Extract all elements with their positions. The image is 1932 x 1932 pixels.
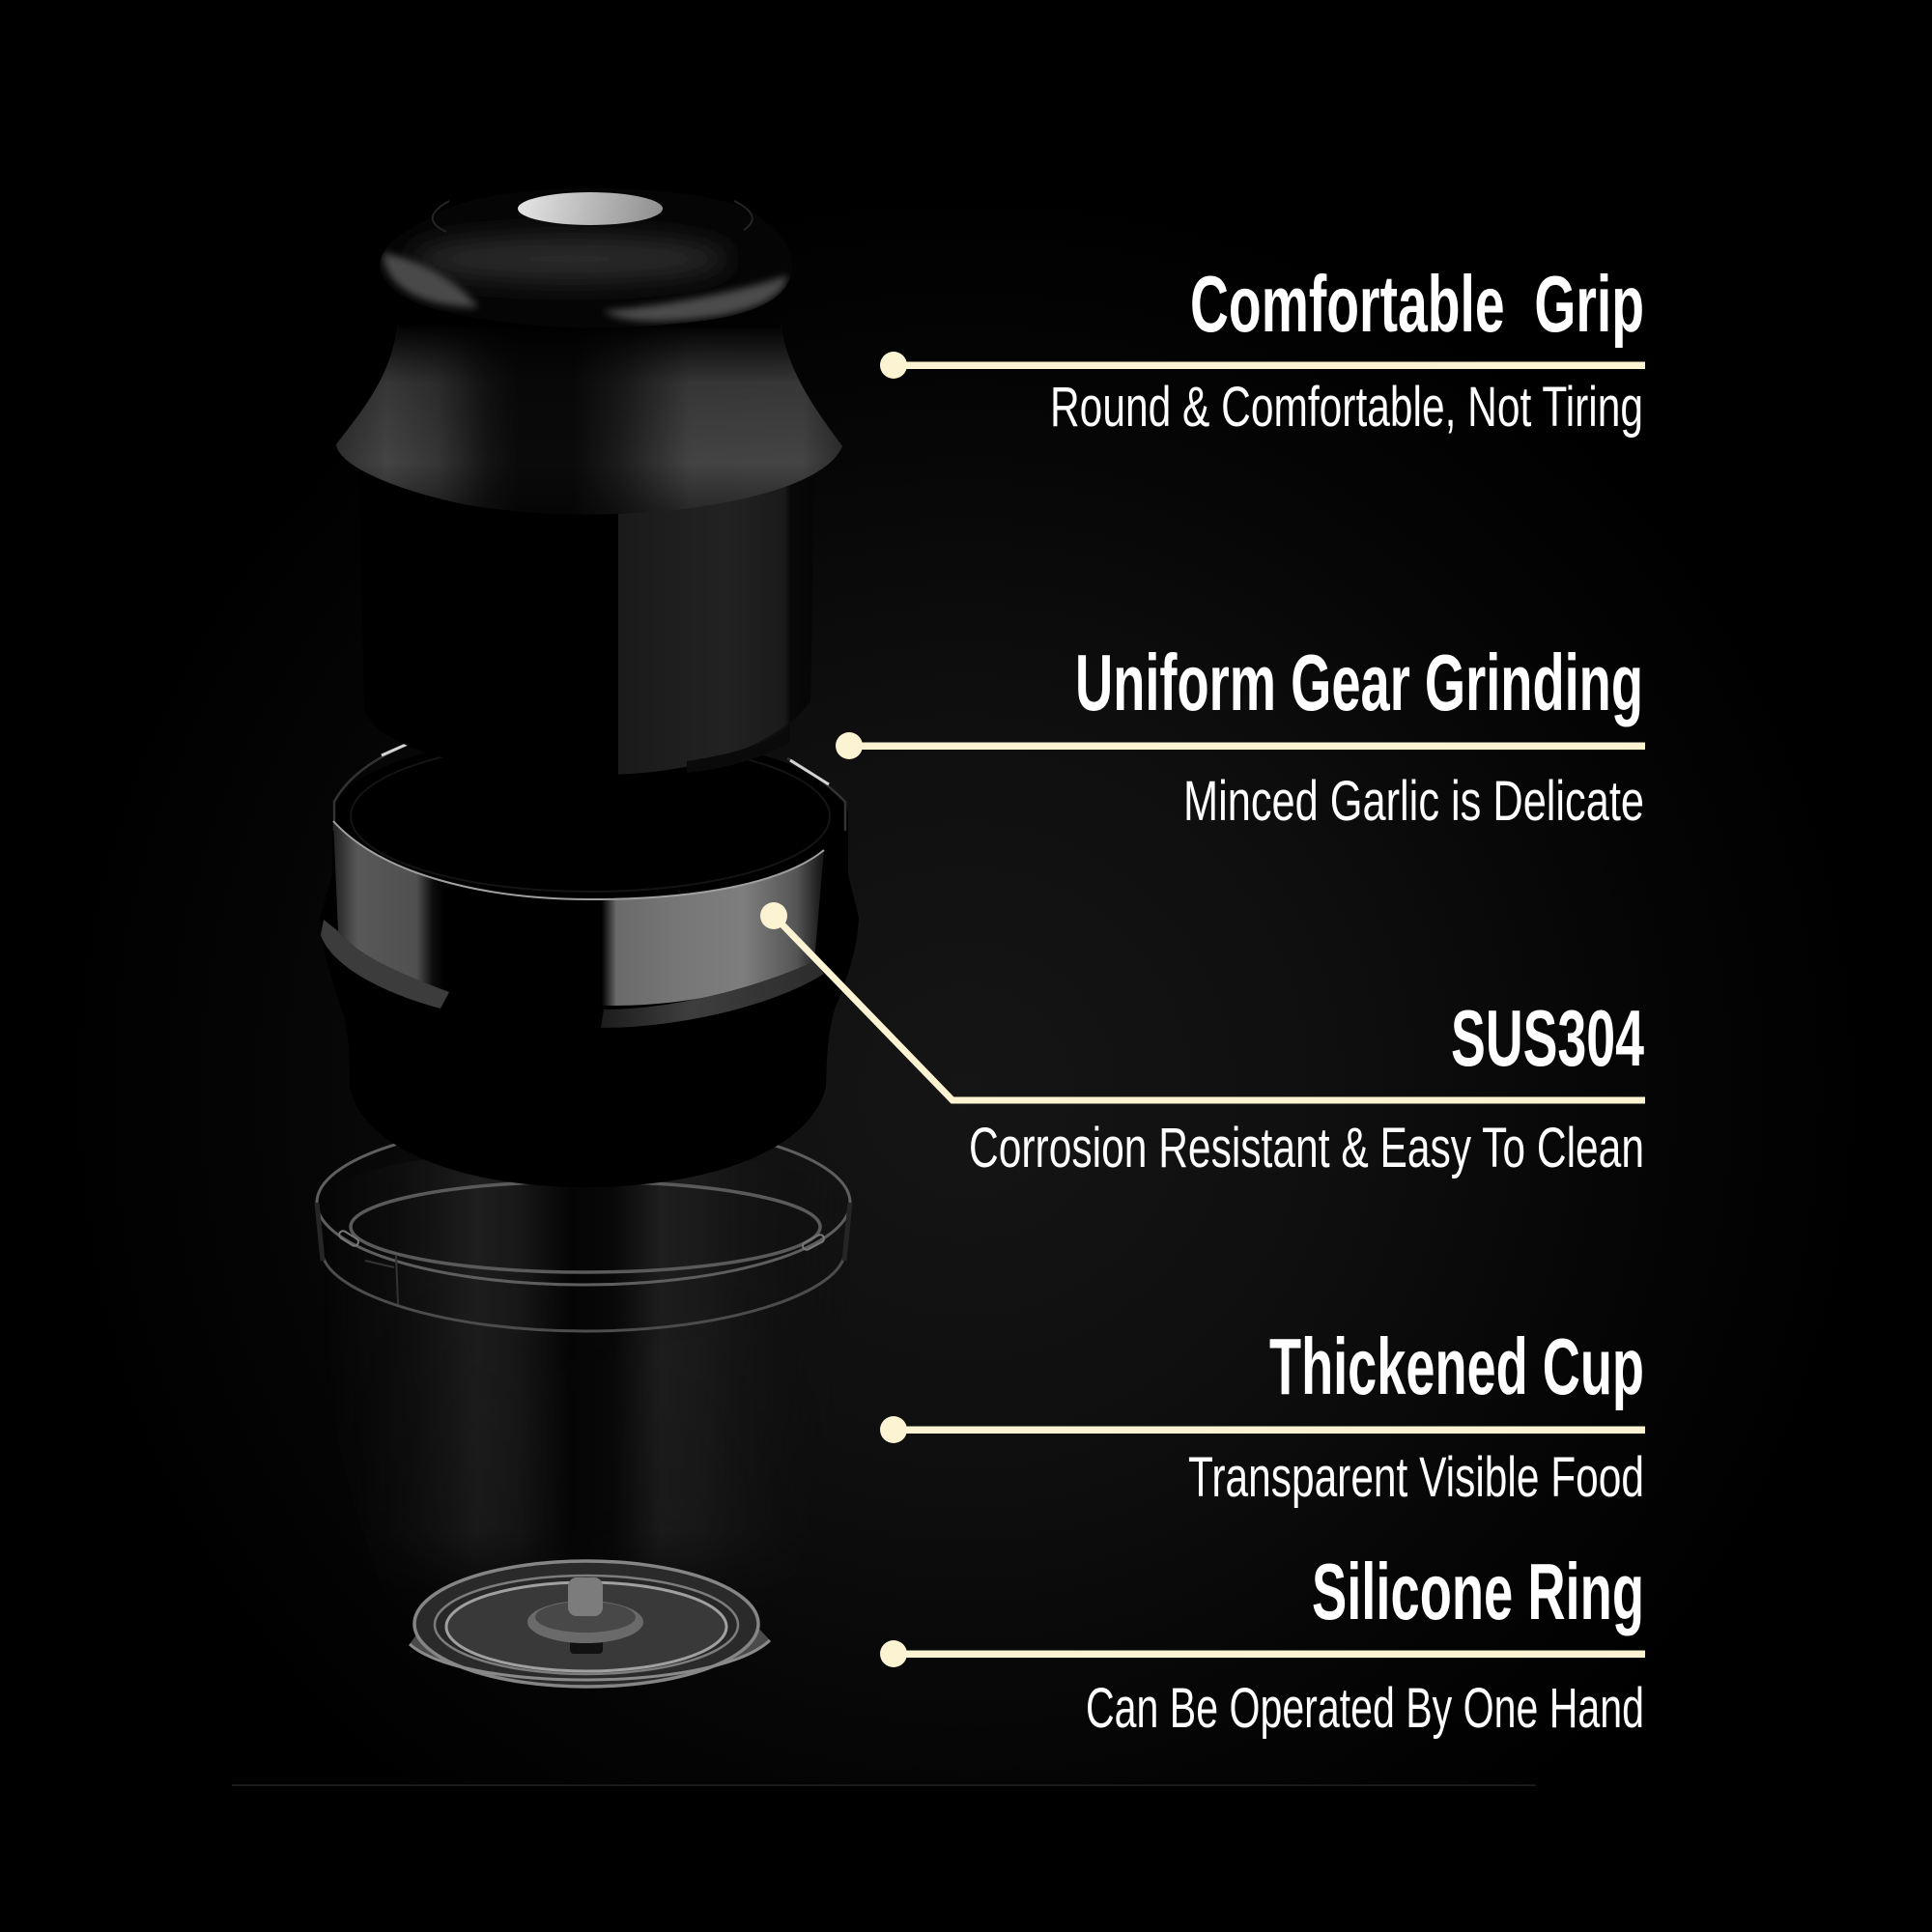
transparent cup	[317, 1121, 850, 1687]
infographic canvas	[232, 192, 1645, 1786]
callout: Silicone Ring: Silicone Ring	[1312, 1547, 1644, 1636]
callout: Uniform Gear Grinding: Minced Garlic is Delicate	[1183, 770, 1644, 833]
callout: Uniform Gear Grinding	[836, 638, 1645, 833]
callout: Uniform Gear Grinding: Uniform Gear Grinding	[1075, 638, 1643, 727]
callout: Silicone Ring: Can Be Operated By One Hand	[1086, 1677, 1644, 1740]
ring ledge	[321, 920, 824, 1028]
lower housing	[320, 874, 859, 1187]
upper housing	[404, 486, 788, 775]
callout: SUS304	[760, 902, 1645, 1179]
cup rim outlines	[317, 1121, 850, 1331]
callout: Comfortable Grip: Comfortable Grip	[1190, 259, 1644, 349]
callout: Comfortable Grip	[880, 259, 1645, 439]
callout: Thickened Cup: Transparent Visible Food	[1188, 1446, 1644, 1509]
knob button	[518, 192, 663, 225]
knob flare	[328, 324, 850, 522]
callout: Comfortable Grip: Round & Comfortable, Not Tiring	[1050, 376, 1643, 439]
callout: SUS304: SUS304	[1451, 993, 1644, 1083]
product: garlic grinder exploded view	[317, 188, 859, 1687]
knob grip	[328, 188, 850, 522]
knob top disc	[381, 200, 790, 327]
callout: Thickened Cup: Thickened Cup	[1269, 1321, 1644, 1411]
cup base and center post	[410, 1561, 770, 1687]
stainless ring	[321, 734, 848, 1028]
callout: Silicone Ring	[880, 1547, 1645, 1740]
callout: Thickened Cup	[880, 1321, 1645, 1509]
callout: SUS304: Corrosion Resistant & Easy To Clean	[969, 1117, 1644, 1179]
